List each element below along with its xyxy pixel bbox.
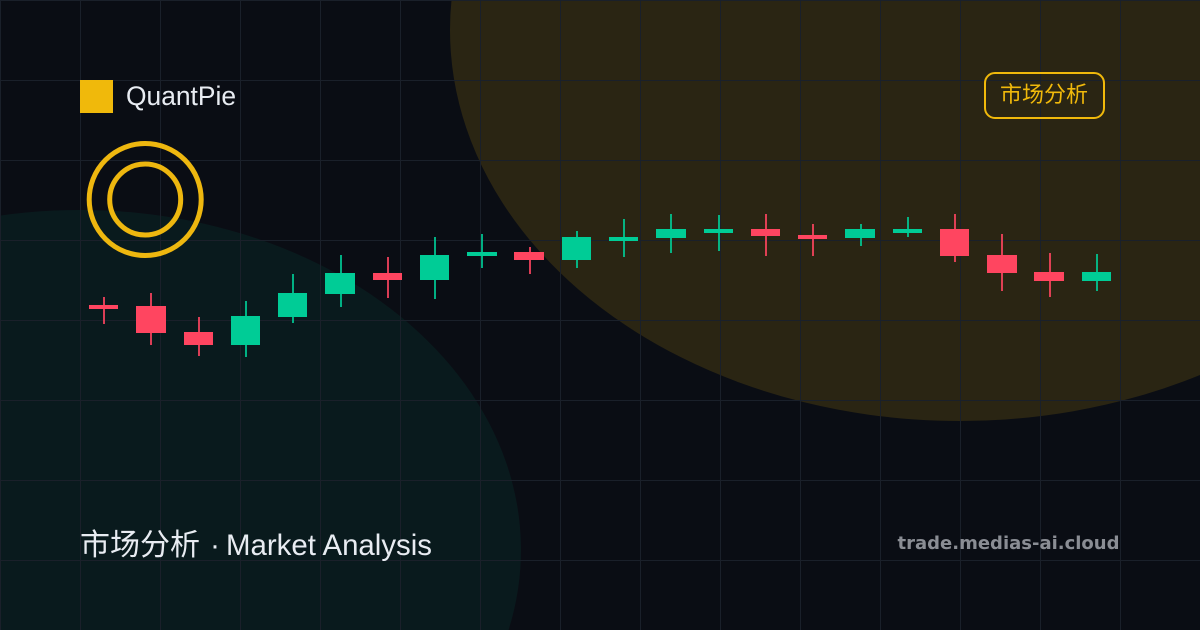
candle 5 bbox=[278, 274, 307, 323]
candle 19 bbox=[940, 214, 969, 262]
candle 20 bbox=[987, 234, 1017, 291]
candle 15 bbox=[751, 214, 780, 256]
candlestick chart bbox=[89, 214, 1111, 357]
candle 16 bbox=[798, 224, 827, 256]
footer title: · bbox=[210, 529, 220, 562]
candle 22 bbox=[1082, 254, 1111, 291]
footer title: Market Analysis bbox=[226, 529, 432, 562]
candle 4 bbox=[231, 301, 260, 357]
candle 6 bbox=[325, 255, 355, 307]
candle 1 bbox=[89, 297, 118, 324]
footer url: trade.medias-ai.cloud bbox=[898, 533, 1120, 554]
icon: concentric rings bbox=[89, 144, 201, 256]
candle 3 bbox=[184, 317, 213, 356]
brand name: QuantPie bbox=[126, 81, 236, 111]
candle 14 bbox=[704, 215, 733, 251]
candle 17 bbox=[845, 224, 875, 246]
footer title: 市场分析 bbox=[80, 529, 200, 562]
badge: market analysis: 市场分析 bbox=[1000, 82, 1088, 107]
badge: market analysis bbox=[985, 73, 1104, 118]
candle 18 bbox=[893, 217, 922, 237]
candle 7 bbox=[373, 257, 402, 298]
candle 8 bbox=[420, 237, 449, 299]
icon: brand square bbox=[80, 80, 113, 113]
candle 21 bbox=[1034, 253, 1064, 297]
candle 9 bbox=[467, 234, 497, 268]
candle 11 bbox=[562, 231, 591, 268]
candle 10 bbox=[514, 247, 544, 274]
candle 12 bbox=[609, 219, 638, 257]
candle 13 bbox=[656, 214, 686, 253]
candle 2 bbox=[136, 293, 166, 345]
